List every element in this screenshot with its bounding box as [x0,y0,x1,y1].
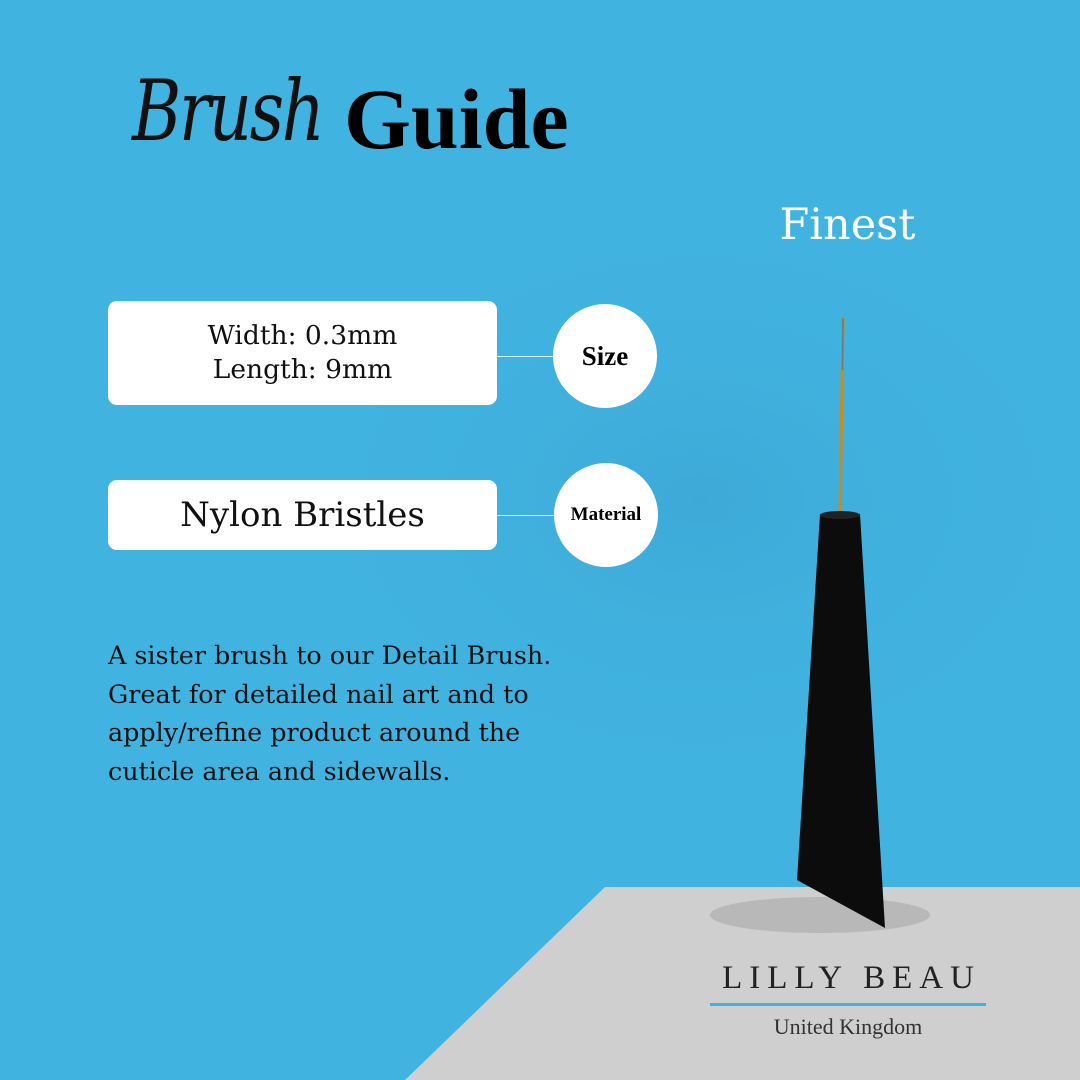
logo: United Kingdom [774,1014,922,1039]
description text: cuticle area and sidewalls. [108,756,450,786]
panel: material box [108,480,497,550]
description text: A sister brush to our Detail Brush. [108,640,551,670]
title: Guide [344,71,569,167]
material circle [554,463,658,567]
description text: apply/refine product around the [108,717,520,747]
logo [710,960,986,1039]
title: Brush [132,62,323,160]
size circle [553,304,657,408]
title [131,62,569,167]
description text: Great for detailed nail art and to [108,678,529,708]
panel: material box: Nylon Bristles [180,495,425,535]
connector [497,515,557,516]
material circle: Material [571,504,641,525]
heading: Finest: Finest [779,200,916,250]
connector [497,356,557,357]
description text [108,640,551,786]
logo: LILLY BEAU [722,960,981,996]
brush image [797,318,885,928]
panel: size box: Width: 0.3mm [208,320,397,351]
panel: size box: Length: 9mm [213,354,392,385]
size circle: Size [582,340,628,370]
panel: size box [108,301,497,405]
